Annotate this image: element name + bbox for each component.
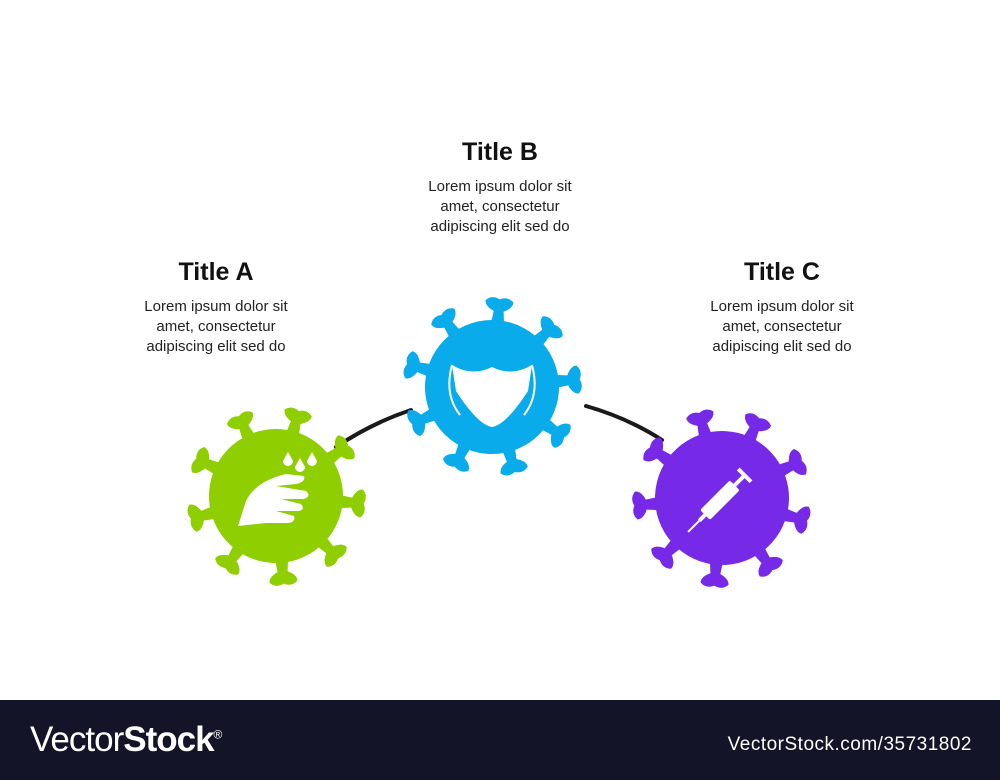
icon: purple virus with syringe <box>602 378 842 617</box>
text block: Title C: Lorem ipsum dolor sit <box>710 298 854 315</box>
text block: Title B <box>428 138 572 235</box>
text block: Title C: Title C <box>744 258 820 286</box>
text block: Title B: Lorem ipsum dolor sit <box>428 178 572 195</box>
text block: Title A: Lorem ipsum dolor sit <box>144 298 288 315</box>
text block: Title A: Title A <box>178 258 254 286</box>
text block: Title C <box>710 258 854 355</box>
text block: Title A: amet, consectetur <box>156 318 276 335</box>
text block: Title A <box>144 258 288 355</box>
text block: Title B: adipiscing elit sed do <box>430 218 570 235</box>
text block: Title B: amet, consectetur <box>440 198 560 215</box>
footer url: VectorStock.com/35731802 <box>728 734 972 755</box>
icon: green virus with washing hands <box>165 386 387 605</box>
footer bar <box>0 700 1000 780</box>
text block: Title C: amet, consectetur <box>722 318 842 335</box>
text block: Title B: Title B <box>462 138 538 166</box>
arrow: connector B to C <box>586 406 662 440</box>
text block: Title C: adipiscing elit sed do <box>712 338 852 355</box>
text block: Title A: adipiscing elit sed do <box>146 338 286 355</box>
arrow: connector A to B <box>336 410 411 447</box>
icon: blue virus with mask <box>394 290 590 484</box>
logo: VectorStock® <box>30 720 221 759</box>
